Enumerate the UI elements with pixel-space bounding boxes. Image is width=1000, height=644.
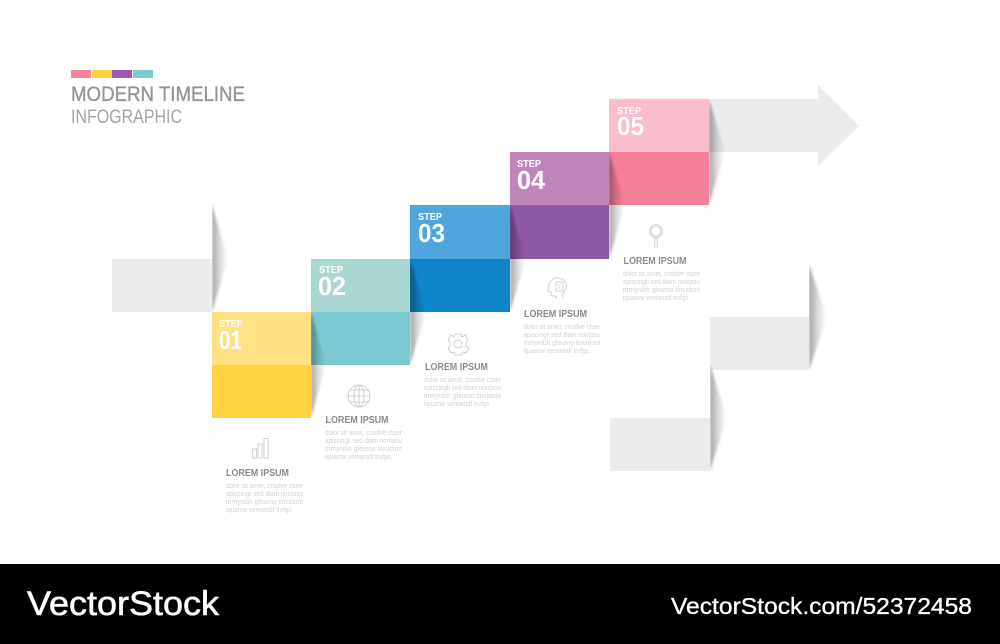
- text block 3: mmynibh gfeumo tincidunt: [424, 393, 501, 400]
- icon: magnifier: [650, 224, 662, 247]
- text block 2: [325, 415, 403, 461]
- step 3 block: 03: [418, 218, 445, 248]
- step 1 block: STEP: [219, 319, 243, 330]
- step 4 block: 04: [517, 165, 546, 195]
- step 3 block: STEP: [418, 212, 442, 223]
- text block 3: apiscingli sed diam nontasu: [424, 385, 501, 392]
- legend colour bars: [71, 70, 153, 78]
- footer bar: VectorStock: [27, 585, 220, 623]
- text block 2: mmynibh gfeumo tincidunt: [325, 446, 402, 453]
- text block 3: iquamw veniamdf trvfgs.: [424, 401, 491, 408]
- text block 4: [524, 309, 601, 355]
- text block 1: apiscingli sed diam nontasu: [226, 491, 303, 498]
- text block 5: apiscingli sed diam nontasu: [623, 279, 700, 286]
- icon: globe: [348, 385, 370, 407]
- gray bottom fold: [610, 365, 727, 471]
- footer bar: VectorStock.com/52372458: [671, 593, 972, 619]
- text block 5: dolor sit amet, cnsdve ctuer: [623, 271, 701, 278]
- text block 1: LOREM IPSUM: [226, 468, 289, 479]
- gray start arrow tail: [112, 205, 228, 312]
- text block 4: apiscingli sed diam nontasu: [524, 332, 601, 339]
- text block 5: mmynibh gfeumo tincidunt: [623, 287, 700, 294]
- text block 2: dolor sit amet, cnsdve ctuer: [325, 430, 403, 437]
- text block 2: apiscingli sed diam nontasu: [325, 438, 402, 445]
- title: [71, 83, 245, 128]
- text block 3: [424, 362, 502, 408]
- text block 1: dolor sit amet, cnsdve ctuer: [226, 483, 304, 490]
- icon: bar chart: [252, 438, 268, 458]
- text block 4: LOREM IPSUM: [524, 309, 587, 320]
- gray right fold: [710, 264, 827, 370]
- text block 1: mmynibh gfeumo tincidunt: [226, 499, 303, 506]
- text block 5: [623, 256, 701, 302]
- title: MODERN TIMELINE: [71, 83, 245, 106]
- text block 5: LOREM IPSUM: [624, 256, 686, 267]
- text block 2: LOREM IPSUM: [326, 415, 388, 426]
- step 5 block: STEP: [617, 106, 641, 117]
- text block 2: iquamw veniamdf trvfgs.: [325, 454, 392, 461]
- step 2 block: STEP: [319, 265, 343, 276]
- text block 1: [226, 468, 304, 514]
- text block 3: dolor sit amet, cnsdve ctuer: [424, 377, 502, 384]
- icon: gear: [448, 334, 469, 355]
- step 4 block: STEP: [517, 159, 541, 170]
- text block 4: mmynibh gfeumo tincidunt: [524, 340, 601, 347]
- step 2 block: [311, 259, 410, 418]
- title: INFOGRAPHIC: [71, 107, 182, 128]
- step 5 block: 05: [617, 111, 644, 141]
- step 4 block: [510, 152, 609, 312]
- text block 4: dolor sit amet, cnsdve ctuer: [524, 324, 601, 331]
- step 1 block: 01: [219, 325, 242, 355]
- step 5 block: [609, 99, 725, 259]
- text block 4: iquamw veniamdf trvfgs.: [524, 348, 591, 355]
- step 3 block: [410, 205, 510, 365]
- footer bar: [0, 564, 1000, 644]
- icon: head with chart: [548, 278, 566, 299]
- text block 5: iquamw veniamdf trvfgs.: [623, 295, 690, 302]
- text block 3: LOREM IPSUM: [425, 362, 488, 373]
- text block 1: iquamw veniamdf trvfgs.: [226, 507, 293, 514]
- step 2 block: 02: [318, 271, 346, 301]
- step 1 block: [212, 312, 311, 418]
- gray arrow head: [709, 85, 859, 166]
